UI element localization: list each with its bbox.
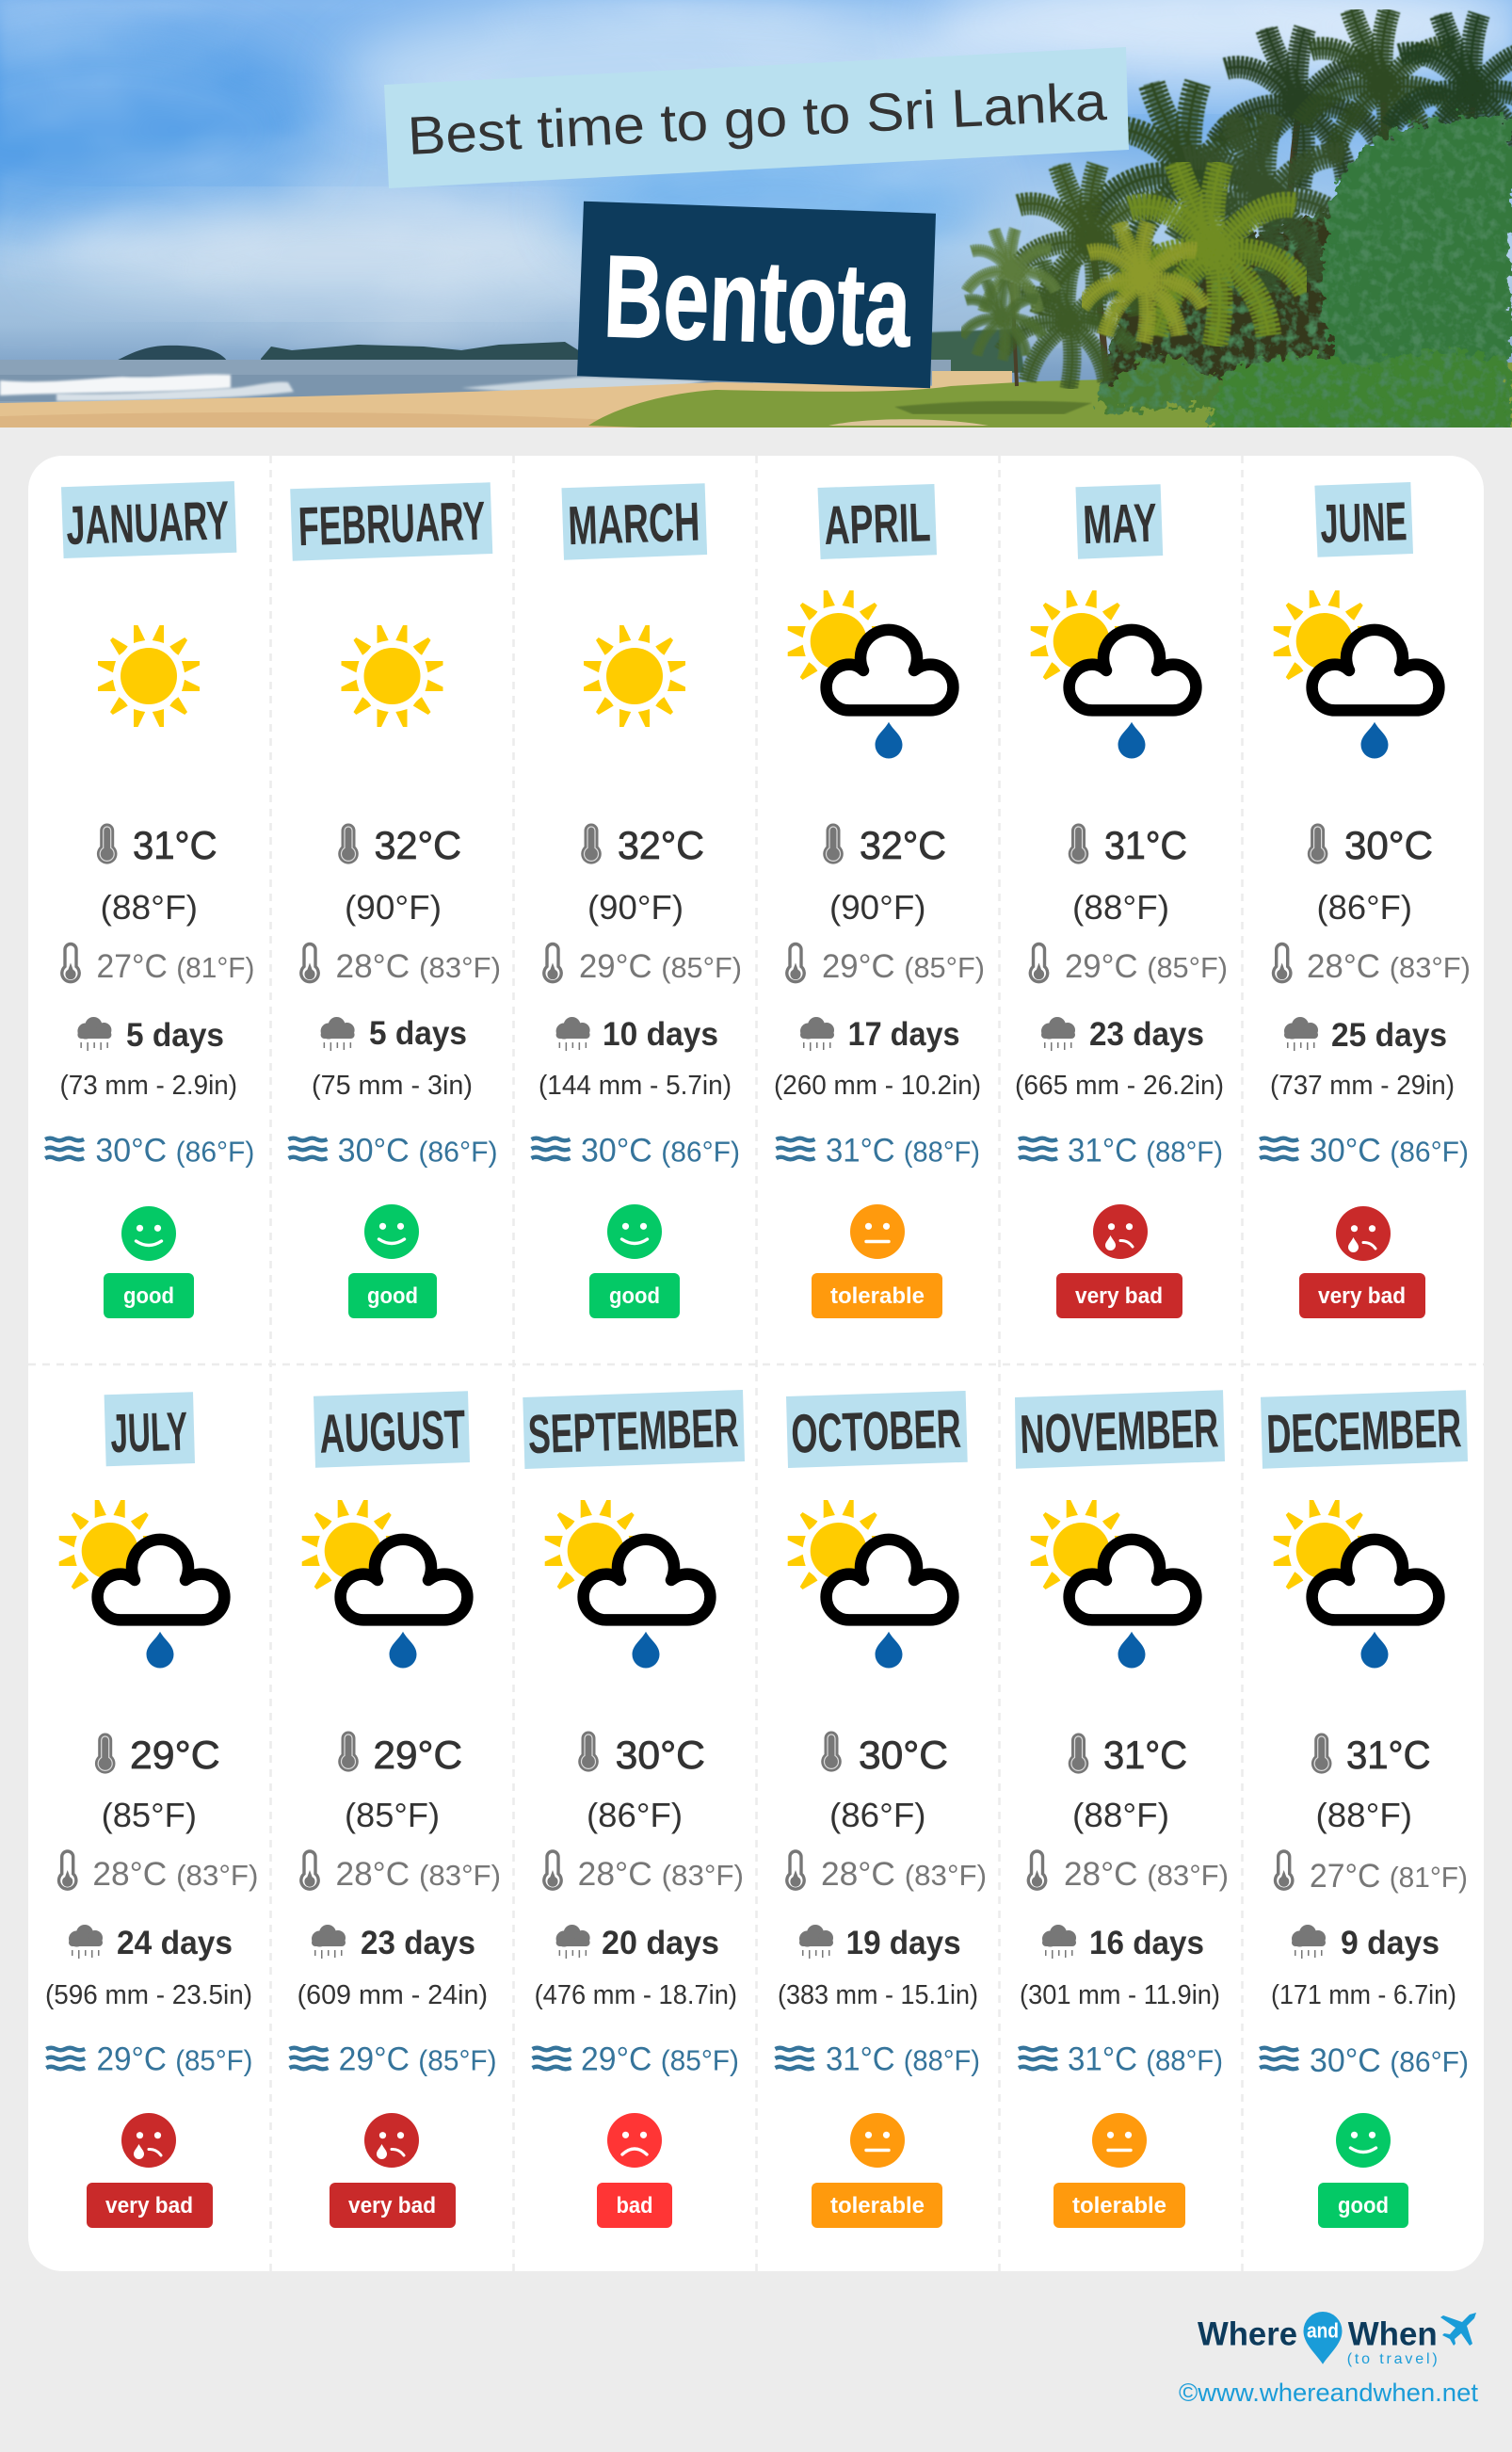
panel: June [1260, 482, 1471, 1318]
rating badge: very bad [348, 2193, 436, 2218]
rating badge: very bad [1318, 1283, 1406, 1309]
rating face [364, 1204, 419, 1259]
rainfall: (737 mm - 29in) [1270, 1071, 1455, 1101]
sea temperature: 30°C (86°F) [1310, 1132, 1469, 1170]
icon: map pin [1303, 2312, 1343, 2364]
low temperature: 29°C (85°F) [1065, 948, 1228, 985]
panel: August [290, 1391, 501, 2228]
logo: Where and When to travel: Where [1198, 2316, 1297, 2353]
logo: Where and When to travel: (to travel) [1347, 2351, 1438, 2367]
rainy days: 24 days [117, 1925, 233, 1961]
rating badge: very bad [105, 2193, 193, 2218]
icon: map pin: and [1307, 2319, 1339, 2343]
rainy days [1042, 1925, 1204, 1961]
rainfall: (609 mm - 24in) [298, 1980, 488, 2010]
rainy days: 19 days [846, 1925, 961, 1961]
high temperature: 31°C [1103, 1733, 1187, 1777]
rating face [1092, 2113, 1147, 2168]
rainfall: (596 mm - 23.5in) [45, 1980, 252, 2010]
rating face [1093, 1204, 1148, 1259]
high temperature fahrenheit: (88°F) [1072, 888, 1169, 927]
icon: sun behind rain cloud [1031, 590, 1196, 759]
rating face [607, 1204, 662, 1259]
rating badge [812, 2183, 942, 2228]
high temperature: 31°C [1104, 823, 1187, 867]
high temperature fahrenheit: (90°F) [587, 888, 684, 927]
month label: APRIL [823, 492, 931, 557]
rainy days: 23 days [1089, 1016, 1204, 1053]
high temperature fahrenheit: (88°F) [1072, 1796, 1169, 1834]
icon: sun behind rain cloud [545, 1500, 710, 1669]
high temperature [823, 823, 946, 867]
low temperature: 27°C (81°F) [96, 948, 254, 985]
rainy days: 23 days [361, 1925, 475, 1961]
month label [817, 484, 937, 559]
rainy days: 5 days [369, 1015, 467, 1052]
panel: September [523, 1390, 745, 2228]
rainfall: (260 mm - 10.2in) [774, 1071, 981, 1101]
low temperature [1275, 1851, 1468, 1895]
low temperature: 29°C (85°F) [579, 948, 742, 985]
month label: AUGUST [318, 1399, 466, 1465]
icon: sun behind rain cloud [302, 1500, 467, 1669]
month label: OCTOBER [790, 1398, 962, 1465]
rating badge: good [1338, 2193, 1389, 2218]
sea temperature: 31°C (88°F) [1068, 1132, 1223, 1170]
city name banner [577, 202, 936, 388]
high temperature fahrenheit: (90°F) [829, 888, 926, 927]
low temperature: 28°C (83°F) [335, 948, 501, 985]
panel: October [776, 1391, 987, 2228]
month label [105, 1392, 195, 1466]
rating face [607, 2113, 662, 2168]
rating badge: good [123, 1283, 174, 1309]
rainy days [77, 1017, 224, 1054]
panel: April [774, 484, 985, 1318]
high temperature [821, 1731, 948, 1777]
logo: Where and When to travel: When [1348, 2316, 1438, 2353]
high temperature [578, 1731, 705, 1777]
icon: sun [584, 625, 685, 727]
icon: sun behind rain cloud [788, 590, 953, 759]
rainy days [312, 1925, 475, 1961]
high temperature: 29°C [130, 1733, 220, 1777]
month label [1075, 484, 1163, 559]
icon: sun behind rain cloud [1274, 1500, 1439, 1669]
rainy days: 10 days [603, 1016, 718, 1053]
month label [786, 1391, 968, 1468]
low temperature: 28°C (83°F) [821, 1856, 987, 1893]
high temperature [338, 1731, 462, 1777]
month label: FEBRUARY [298, 491, 487, 557]
rating badge [812, 1273, 942, 1318]
rainy days [1292, 1925, 1440, 1961]
high temperature [338, 823, 461, 867]
high temperature: 32°C [375, 823, 461, 867]
title banner: Best time to go to Sri Lanka [406, 72, 1108, 167]
rating face [1336, 1206, 1391, 1261]
low temperature: 28°C (83°F) [335, 1856, 501, 1893]
rating badge: good [367, 1283, 418, 1309]
high temperature: 30°C [616, 1733, 705, 1777]
sea temperature: 30°C (86°F) [1310, 2042, 1469, 2079]
high temperature: 30°C [1344, 823, 1433, 867]
rating face [364, 2113, 419, 2168]
rating badge [87, 2183, 213, 2228]
rainfall: (75 mm - 3in) [312, 1071, 473, 1101]
rainy days [69, 1925, 233, 1961]
icon: sun [98, 625, 200, 727]
panel: February [288, 482, 501, 1318]
icon: airplane [1440, 2313, 1476, 2346]
rating badge [1318, 2183, 1408, 2228]
rating badge [330, 2183, 456, 2228]
rainy days [556, 1016, 718, 1053]
sea temperature: 30°C (86°F) [581, 1132, 740, 1170]
rainfall: (73 mm - 2.9in) [60, 1071, 237, 1101]
icon: sun behind rain cloud [59, 1500, 224, 1669]
rainy days [321, 1015, 467, 1052]
rainfall: (476 mm - 18.7in) [535, 1980, 737, 2010]
low temperature: 29°C (85°F) [822, 948, 985, 985]
icon: sun behind rain cloud [1031, 1500, 1196, 1669]
rainy days: 5 days [126, 1017, 224, 1054]
title banner [384, 47, 1129, 188]
high temperature [1311, 1733, 1431, 1777]
high temperature: 30°C [859, 1733, 948, 1777]
rainfall: (665 mm - 26.2in) [1015, 1071, 1224, 1101]
rainfall: (171 mm - 6.7in) [1271, 1980, 1456, 2010]
icon: sun [341, 625, 442, 727]
panel: January [45, 481, 254, 1318]
rating badge [104, 1273, 194, 1318]
rating badge: tolerable [1072, 2193, 1166, 2218]
rating badge [348, 1273, 437, 1318]
high temperature: 31°C [133, 823, 217, 867]
low temperature: 28°C (83°F) [578, 1856, 744, 1893]
sea temperature: 30°C (86°F) [95, 1132, 254, 1170]
high temperature [581, 823, 704, 867]
rainy days [800, 1016, 960, 1053]
rating face [850, 2113, 905, 2168]
rainy days: 25 days [1331, 1017, 1447, 1054]
high temperature: 29°C [373, 1733, 462, 1777]
rating badge [1299, 1273, 1425, 1318]
high temperature fahrenheit: (86°F) [829, 1796, 926, 1834]
rating badge: tolerable [830, 1283, 925, 1309]
high temperature fahrenheit: (85°F) [345, 1796, 440, 1834]
main card [28, 456, 1484, 2271]
rating badge [597, 2183, 672, 2228]
sea temperature: 29°C (85°F) [96, 2041, 252, 2077]
month label: MARCH [567, 492, 700, 557]
month label [314, 1391, 470, 1468]
panel: May [1015, 484, 1228, 1318]
rating badge [1056, 1273, 1182, 1318]
month label [523, 1390, 745, 1469]
panel: December [1260, 1390, 1469, 2228]
panel: March [531, 483, 742, 1318]
high temperature fahrenheit: (88°F) [100, 888, 198, 927]
panel: July [45, 1392, 258, 2228]
high temperature [97, 823, 217, 867]
high temperature [1069, 823, 1187, 867]
month label [561, 483, 707, 560]
rating badge: very bad [1075, 1283, 1163, 1309]
high temperature fahrenheit: (86°F) [587, 1796, 683, 1834]
high temperature fahrenheit: (85°F) [102, 1796, 197, 1834]
low temperature: 28°C (83°F) [92, 1856, 258, 1893]
month label: JUNE [1319, 491, 1407, 555]
rating face [121, 1206, 176, 1261]
high temperature: 31°C [1346, 1733, 1431, 1777]
rainfall: (144 mm - 5.7in) [539, 1071, 732, 1101]
month label: MAY [1082, 492, 1158, 556]
month label: SEPTEMBER [527, 1397, 739, 1465]
sea temperature: 31°C (88°F) [1068, 2041, 1223, 2077]
sea temperature: 31°C (88°F) [826, 2041, 980, 2077]
rating badge: good [609, 1283, 660, 1309]
rainy days: 20 days [602, 1925, 719, 1961]
website credit: ©www.whereandwhen.net [1179, 2379, 1478, 2407]
sea temperature: 29°C (85°F) [339, 2041, 497, 2077]
sea temperature: 29°C (85°F) [581, 2041, 739, 2077]
low temperature: 28°C (83°F) [1064, 1856, 1229, 1893]
rating badge: bad [616, 2193, 653, 2218]
low temperature: 28°C (83°F) [1307, 948, 1471, 985]
rainfall: (383 mm - 15.1in) [778, 1980, 978, 2010]
month label: JANUARY [65, 490, 230, 557]
panel: November [1015, 1390, 1229, 2228]
month label: NOVEMBER [1019, 1397, 1219, 1465]
sea temperature: 30°C (86°F) [338, 1132, 498, 1170]
rainy days: 16 days [1089, 1925, 1204, 1961]
rainy days [799, 1925, 961, 1961]
high temperature fahrenheit: (88°F) [1316, 1796, 1412, 1834]
hero photo: beach with palm trees [0, 0, 1512, 443]
high temperature: 32°C [860, 823, 946, 867]
high temperature [1069, 1733, 1187, 1777]
rating badge: tolerable [830, 2193, 925, 2218]
rating face [1336, 2113, 1391, 2168]
rating face [850, 1204, 905, 1259]
high temperature: 32°C [618, 823, 704, 867]
sea temperature: 31°C (88°F) [826, 1132, 980, 1170]
month label [1314, 482, 1413, 557]
rainfall: (301 mm - 11.9in) [1020, 1980, 1220, 2010]
high temperature fahrenheit: (86°F) [1316, 888, 1412, 927]
icon: sun behind rain cloud [1274, 590, 1439, 759]
rainy days: 17 days [848, 1016, 960, 1053]
rating badge [589, 1273, 680, 1318]
month label: JULY [109, 1401, 188, 1464]
rating badge [1054, 2183, 1185, 2228]
logo: Where and When to travel [1198, 2312, 1476, 2367]
city name banner: Bentota [602, 232, 913, 372]
low temperature: 27°C (81°F) [1310, 1858, 1468, 1895]
month label [61, 481, 236, 558]
high temperature fahrenheit: (90°F) [345, 888, 442, 927]
icon: sun behind rain cloud [788, 1500, 953, 1669]
rainy days [1284, 1017, 1447, 1054]
month label [1015, 1390, 1225, 1469]
rainy days [1041, 1016, 1204, 1053]
month label [290, 482, 492, 561]
rating face [121, 2113, 176, 2168]
rainy days: 9 days [1341, 1925, 1440, 1961]
